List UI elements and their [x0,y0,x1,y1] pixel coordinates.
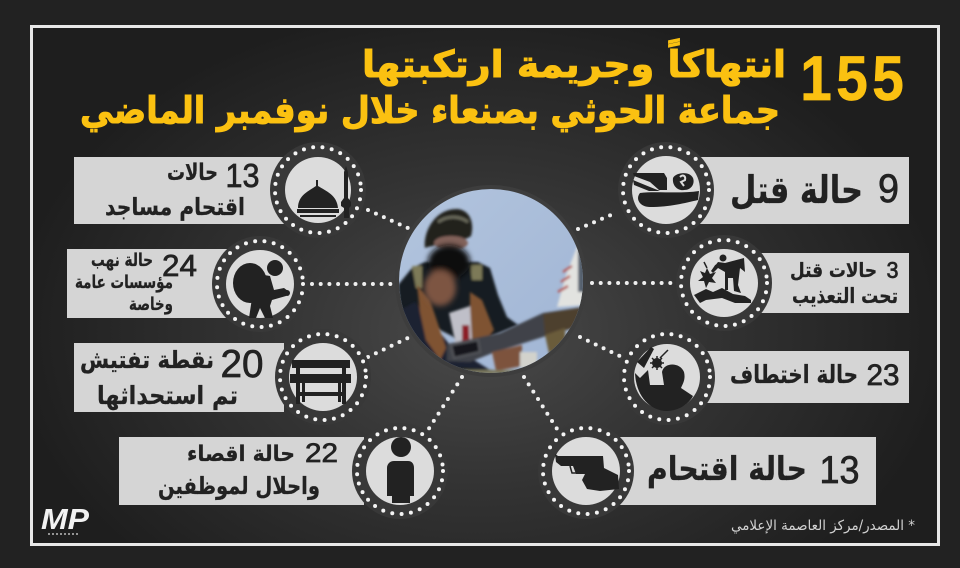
logo: MP [41,504,90,536]
panel: 23 kidnappings [619,329,909,425]
label line 1: حالة نهب [91,250,153,271]
icon: person [352,423,448,519]
label: حالة اختطاف [730,360,858,389]
label box [74,343,284,412]
label line 2: مؤسسات عامة [75,272,173,293]
panel: 13 raids [538,423,876,519]
title number: 155 [800,43,904,114]
label box [700,157,909,224]
count: 22 [305,438,338,468]
panel: 22 dismissals [119,423,448,519]
label box [615,437,876,505]
icon: thief with sack [212,236,308,332]
title line 2: جماعة الحوثي بصنعاء خلال نوفمبر الماضي [80,89,780,132]
panel: 3 deaths under torture [676,235,909,331]
icon: handgun [538,423,634,519]
count: 24 [162,248,197,283]
count: 13 [226,157,260,194]
panel: 9 killings [618,142,909,238]
label line 2: تم استحداثها [97,381,238,411]
source note: * المصدر/مركز العاصمة الإعلامي [731,518,915,534]
central photo [399,185,583,373]
count: 9 [878,167,899,211]
label line 2: تحت التعذيب [792,284,898,308]
title block [80,38,904,132]
label box [760,253,909,313]
count: 20 [220,343,264,386]
label: حالة اقتحام [647,449,807,488]
label line 2: واحلال لموظفين [158,472,320,500]
label box [119,437,364,505]
label box [67,249,227,318]
title line 1: انتهاكاً وجريمة ارتكبتها [362,38,786,86]
icon: torture [676,235,772,331]
label line 3: وخاصة [129,294,173,315]
count: 3 [886,257,898,283]
label box [700,351,909,403]
icon: checkpoint bench [275,329,371,425]
label line 1: حالات [167,160,218,186]
label line 2: اقتحام مساجد [105,193,245,221]
icon: kidnapping [619,329,715,425]
connector dots [312,210,673,432]
icon: killing [618,142,714,238]
panel: 20 checkpoints [74,329,371,425]
label line 1: نقطة تفتيش [80,346,214,374]
count: 23 [866,359,900,392]
label line 1: حالة اقصاء [187,442,295,467]
panel: 13 mosque raids [74,142,366,238]
panel: 24 looting cases [67,236,308,332]
icon: mosque [270,142,366,238]
count: 13 [820,449,860,492]
label box [74,157,284,224]
label: حالة قتل [730,168,863,212]
label line 1: حالات قتل [790,258,877,282]
